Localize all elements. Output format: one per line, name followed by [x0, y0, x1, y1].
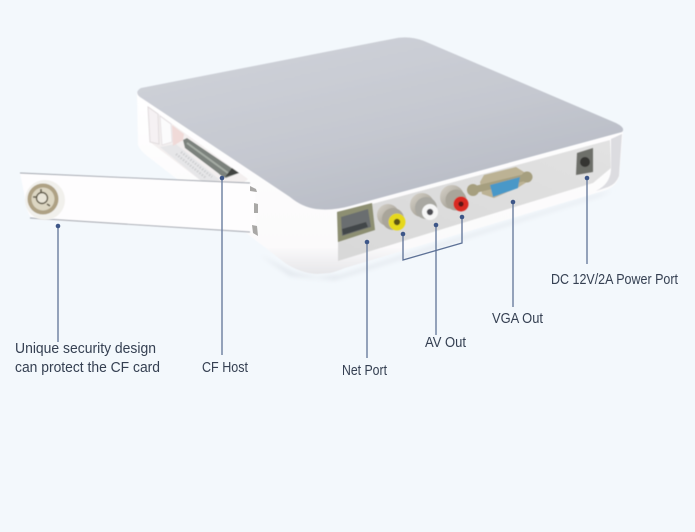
label: Net Port: Net Port: [342, 363, 387, 379]
bay pink wall: [172, 125, 184, 146]
hinged security flap: [20, 173, 258, 236]
leader: net port: [365, 240, 369, 358]
leader: power port: [585, 176, 589, 264]
VGA port: [467, 167, 532, 198]
CF card bay: [148, 106, 248, 186]
leader: VGA out: [511, 200, 515, 307]
DC power jack: [576, 148, 593, 175]
label: power port: DC 12V/2A Power Port: [551, 272, 678, 288]
bay opening: [148, 106, 248, 186]
right corner of body: [596, 134, 622, 191]
device: [20, 37, 623, 280]
RJ45 net port: [337, 203, 375, 242]
hinge notches: [250, 186, 258, 236]
bracket: AV jacks: [401, 215, 464, 260]
key lock: [25, 180, 65, 220]
red RCA jack: [440, 185, 468, 212]
label: AV Out: AV Out: [425, 335, 466, 351]
leader: security flap: [56, 224, 60, 342]
label: security design: Unique security design: [15, 341, 156, 357]
flap edge lines: [20, 173, 250, 232]
white RCA jack: [410, 193, 438, 220]
CF slot connector: [183, 138, 239, 178]
leader: AV out: [434, 223, 438, 335]
device body: [137, 92, 623, 274]
bay inner floor: [160, 144, 220, 184]
flap plate: [20, 173, 256, 234]
leader: CF host: [220, 176, 224, 355]
bay vertical ribs: [148, 107, 159, 144]
label: security design: can protect the CF card: [15, 360, 160, 376]
device top face: [137, 37, 623, 210]
device shadow: [260, 190, 612, 280]
yellow RCA jack: [377, 204, 406, 230]
port panel: [338, 140, 611, 261]
label: CF Host: CF Host: [202, 360, 248, 376]
label: security design: [15, 341, 160, 376]
label: VGA Out: VGA Out: [492, 311, 543, 327]
